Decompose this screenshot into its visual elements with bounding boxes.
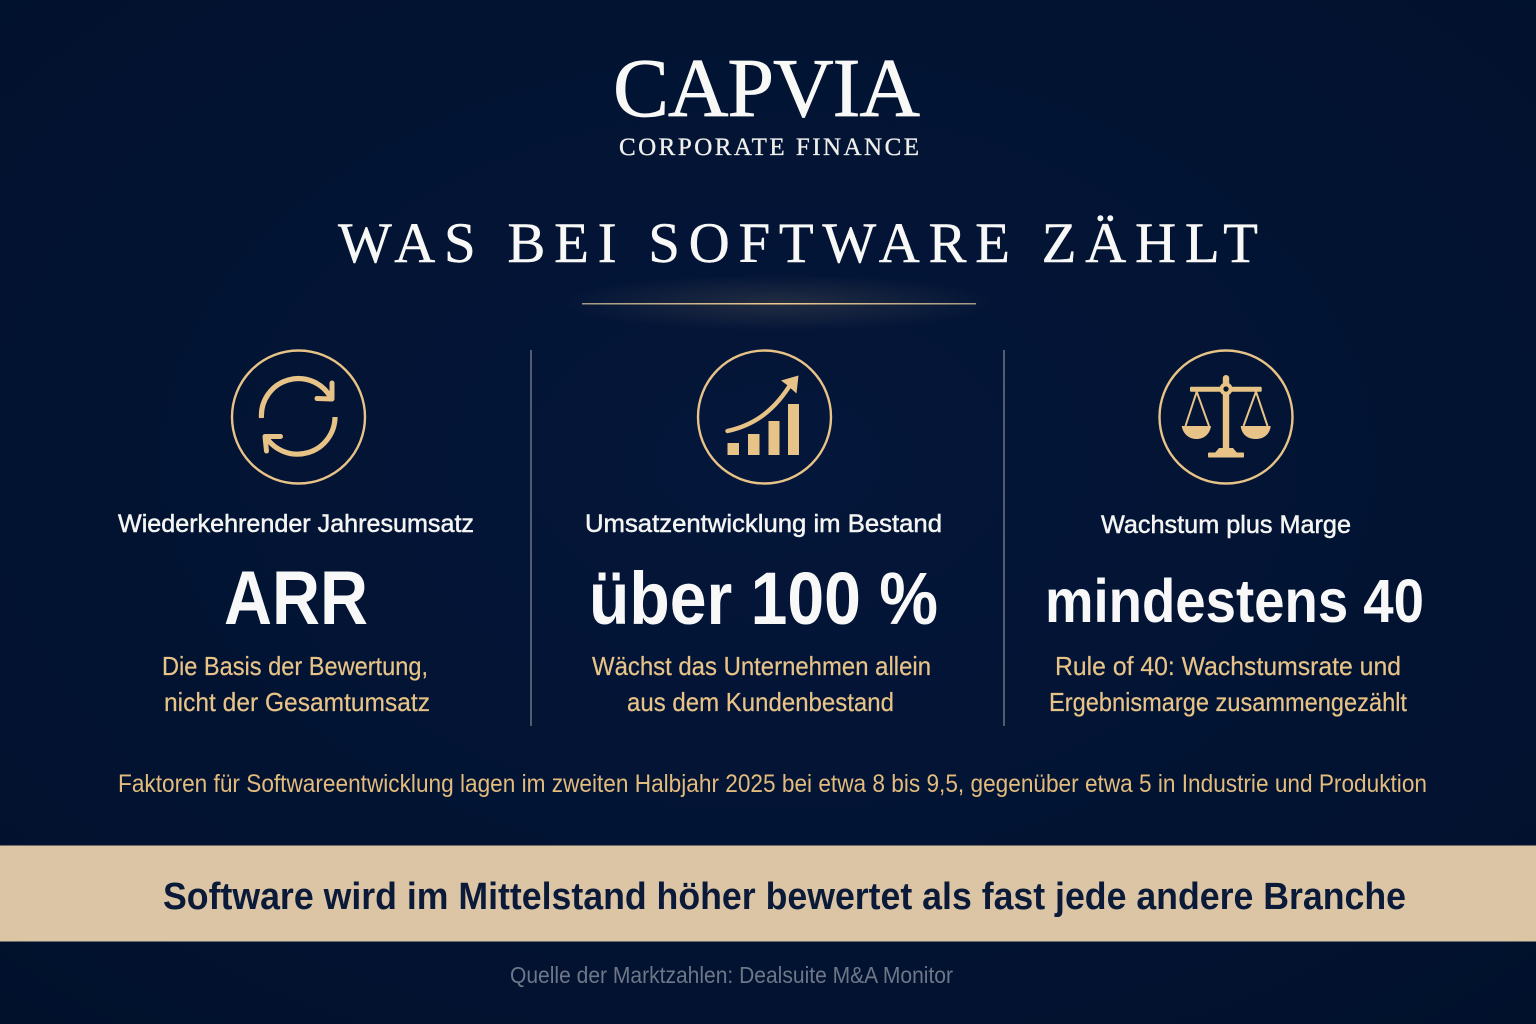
description xyxy=(592,651,931,717)
label: Wiederkehrender Jahresumsatz xyxy=(118,510,474,538)
label: Wachstum plus Marge xyxy=(1101,511,1351,539)
description: Rule of 40: Wachstumsrate und xyxy=(1055,651,1401,681)
title: WAS BEI SOFTWARE ZÄHLT xyxy=(338,212,1258,275)
description xyxy=(162,651,430,717)
description: Ergebnismarge zusammengezählt xyxy=(1049,687,1408,717)
logo xyxy=(613,42,920,161)
label: Umsatzentwicklung im Bestand xyxy=(585,510,942,538)
description: Die Basis der Bewertung, xyxy=(162,651,428,681)
market multiples note: Faktoren für Softwareentwicklung lagen im zweiten Halbjahr 2025 bei etwa 8 bis 9,5, gegenüber etwa 5 in Industrie und Produktion xyxy=(118,770,1427,798)
panel: ARR xyxy=(118,350,474,717)
panel: net revenue retention xyxy=(585,350,942,717)
description: nicht der Gesamtumsatz xyxy=(164,687,430,717)
logo subtitle: CORPORATE FINANCE xyxy=(619,134,919,161)
description: aus dem Kundenbestand xyxy=(627,687,894,717)
icon: recurring arrows xyxy=(232,350,365,484)
logo wordmark: CAPVIA xyxy=(613,42,920,135)
source: Quelle der Marktzahlen: Dealsuite M&A Monitor xyxy=(510,962,953,988)
description xyxy=(1049,651,1408,717)
conclusion band xyxy=(0,846,1536,942)
icon: scales xyxy=(1160,350,1292,484)
panel: rule of 40 xyxy=(1045,350,1424,717)
conclusion text: Software wird im Mittelstand höher bewertet als fast jede andere Branche xyxy=(163,876,1406,918)
key figure: ARR xyxy=(224,556,368,641)
title underline with glow xyxy=(564,275,994,331)
key figure: über 100 % xyxy=(589,557,938,640)
key figure: mindestens 40 xyxy=(1045,567,1424,635)
icon: growth chart xyxy=(698,350,831,484)
description: Wächst das Unternehmen allein xyxy=(592,651,931,681)
